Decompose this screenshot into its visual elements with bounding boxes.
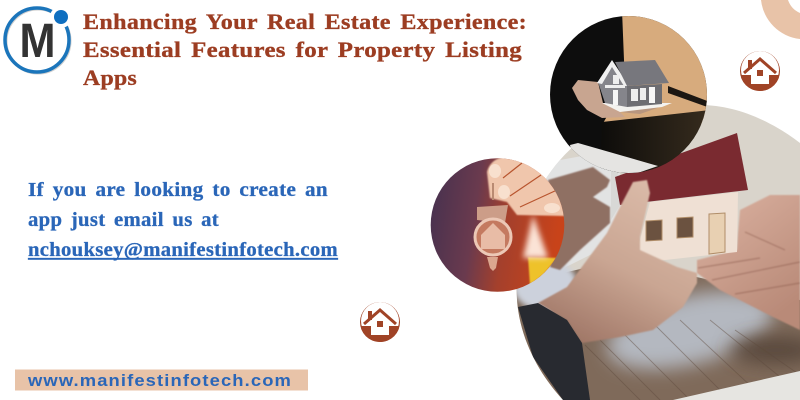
model house roof <box>615 133 748 205</box>
footer website bar <box>15 370 308 390</box>
post behind house <box>611 172 620 220</box>
house windows and door <box>646 213 725 254</box>
icon: house badge top right <box>740 51 780 92</box>
back hand <box>548 167 610 270</box>
photo: hand presenting model house <box>550 16 707 173</box>
front hand <box>538 180 697 343</box>
key with house ring <box>475 183 511 271</box>
title: Essential Features for Property Listing <box>83 37 522 62</box>
title: Enhancing Your Real Estate Experience: <box>83 9 527 34</box>
sleeve <box>518 303 590 400</box>
title: Apps <box>83 65 137 90</box>
right open hands <box>697 195 800 330</box>
decorative peach arc top right <box>761 0 800 39</box>
table <box>510 259 800 400</box>
footer website bar: www.manifestinfotech.com <box>27 372 292 390</box>
body text: email call to action: app just email us at <box>28 209 219 231</box>
paper <box>673 371 800 400</box>
photo: hand holding house key <box>430 157 568 293</box>
logo <box>5 6 72 73</box>
body text: email call to action <box>28 179 338 261</box>
body text: email call to action: If you are looking to create an <box>28 179 328 201</box>
model house <box>572 60 672 118</box>
fingers <box>487 157 568 216</box>
body text: email call to action: nchouksey@manifestinfotech.com <box>28 239 338 261</box>
title <box>83 9 527 90</box>
photo: hands holding model house <box>510 100 800 400</box>
logo: M <box>20 15 56 68</box>
model house wall <box>638 192 738 262</box>
icon: house badge lower centre <box>360 302 400 343</box>
